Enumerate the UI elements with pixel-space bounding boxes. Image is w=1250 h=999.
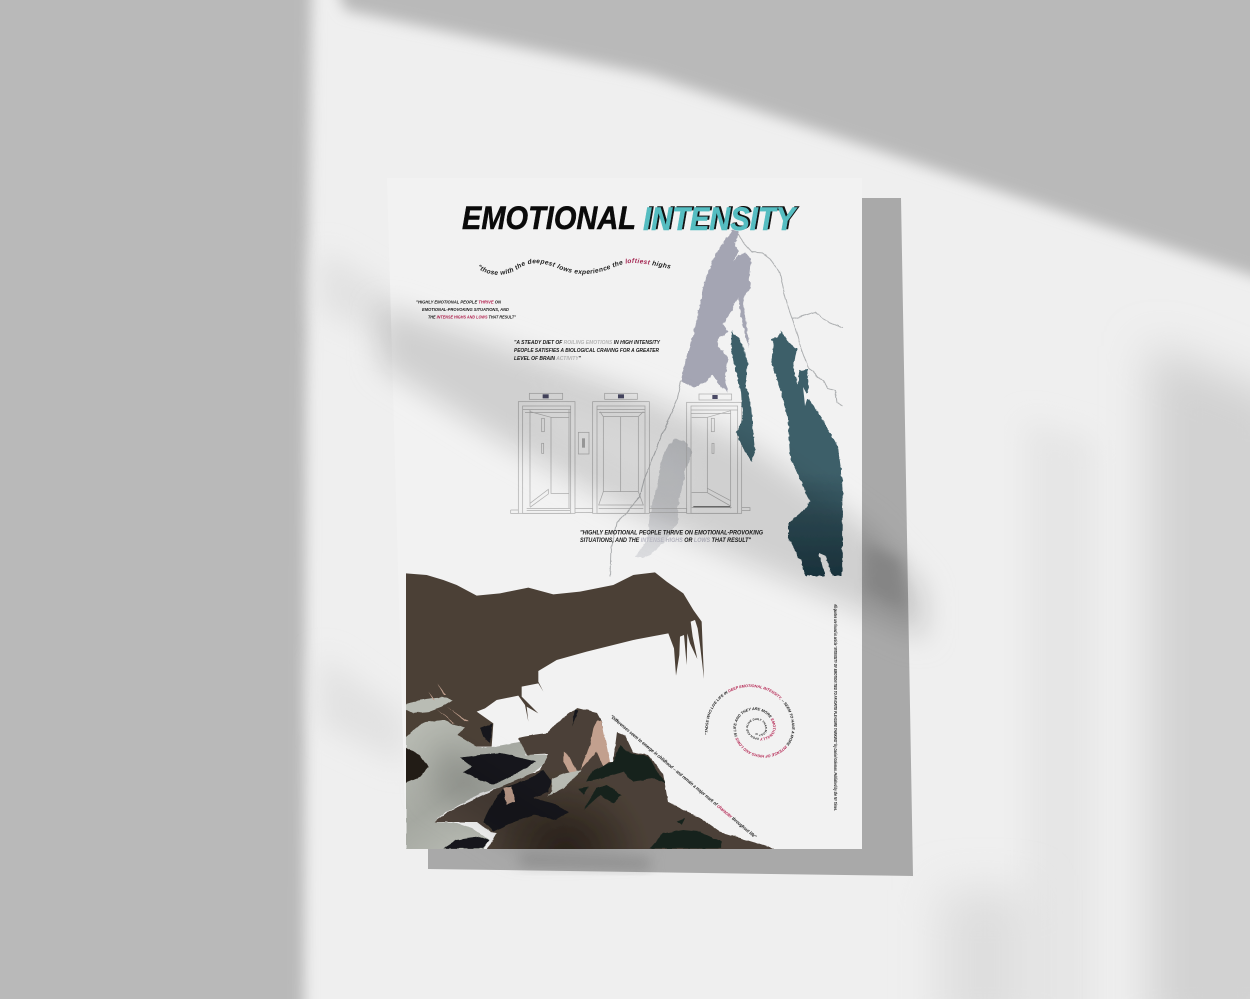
sage valley [406,720,548,850]
quote: thrive on emotional situations: "HIGHLY EMOTIONAL PEOPLE THRIVE ON [416,300,502,304]
poster drop shadow [428,198,913,876]
rocky landscape illustration [403,572,777,850]
quote: intense highs or lows: SITUATIONS, AND THE INTENSE HIGHS OR LOWS THAT RESULT" [580,537,751,544]
pink sunlit rock [428,683,610,805]
elevator: right, door open [687,394,742,513]
elevator: centre, doors closed [593,393,649,513]
title: INTENSITY [643,201,797,237]
teal island fjord cut [803,387,808,406]
teal island: large [771,331,843,576]
poster sheet [387,178,862,849]
brown overhanging cliff [406,572,704,747]
sage outcrop [547,770,582,797]
quote: steady diet of roiling emotions: "A STEADY DIET OF ROILING EMOTIONS IN HIGH INTENSITY [514,340,661,346]
mountain contour line [610,233,843,577]
diagonal quote along the ridge: "Differences seem to emerge in childhood -- and remain a major mark of character throughout life" [609,714,758,840]
lilac mountain island [681,229,751,392]
elevator: left, door open [518,393,575,513]
wavy subtitle quote: "those with the deepest lows experience the loftiest highs" [479,258,671,276]
quote: steady diet of roiling emotions: PEOPLE SATISFIES A BIOLOGICAL CRAVING FOR A GREATER [514,348,660,354]
dark teal islands [731,331,843,576]
elevator call panel [578,432,589,454]
title [462,200,799,237]
quote: steady diet of roiling emotions [514,340,661,362]
vertical source credit: All quotes are found in article "INTENSITY OF EMOTION TIED TO FAVORITE PLEASURE THINKING" by Daniel Goleman. Published by the NY Times. [833,603,838,811]
black shadow masses [403,709,578,848]
title: EMOTIONAL [462,200,636,236]
sage ledge [403,697,453,713]
quote: thrive on emotional situations [416,300,517,320]
brown left foothill [406,710,444,737]
elevators illustration [511,393,750,513]
window shadows falling over the poster [380,305,925,870]
faded gray island [635,438,693,557]
quote: intense highs or lows [580,530,763,544]
quote: steady diet of roiling emotions: LEVEL OF BRAIN ACTIVITY" [514,356,581,362]
dark green rock texture [578,745,722,848]
quote: thrive on emotional situations: THE INTENSE HIGHS AND LOWS THAT RESULT" [428,314,517,320]
rocky ridge base [435,708,777,850]
title: INTENSITY [645,200,799,236]
quote: thrive on emotional situations: EMOTIONAL-PROVOKING SITUATIONS, AND [422,307,509,312]
quote: intense highs or lows: "HIGHLY EMOTIONAL PEOPLE THRIVE ON EMOTIONAL-PROVOKING [580,530,763,536]
teal island: small [731,331,755,462]
spiral quote: "THOSE WHO LIVE LIFE IN DEEP EMOTIONAL INTENSITY, -- SEEM TO HAVE A MORE INTENSE OF HIGHS AND LOWS IN LIFE AND THEY ARE MORE EMOTIONALLY OPEN AND ALIVE DAILY THAN MOST OTHERS AND THEY FEEL EVERY EMOTION MUCH MORE DEEPLY THAN MOST OF US DO" [705,684,795,758]
